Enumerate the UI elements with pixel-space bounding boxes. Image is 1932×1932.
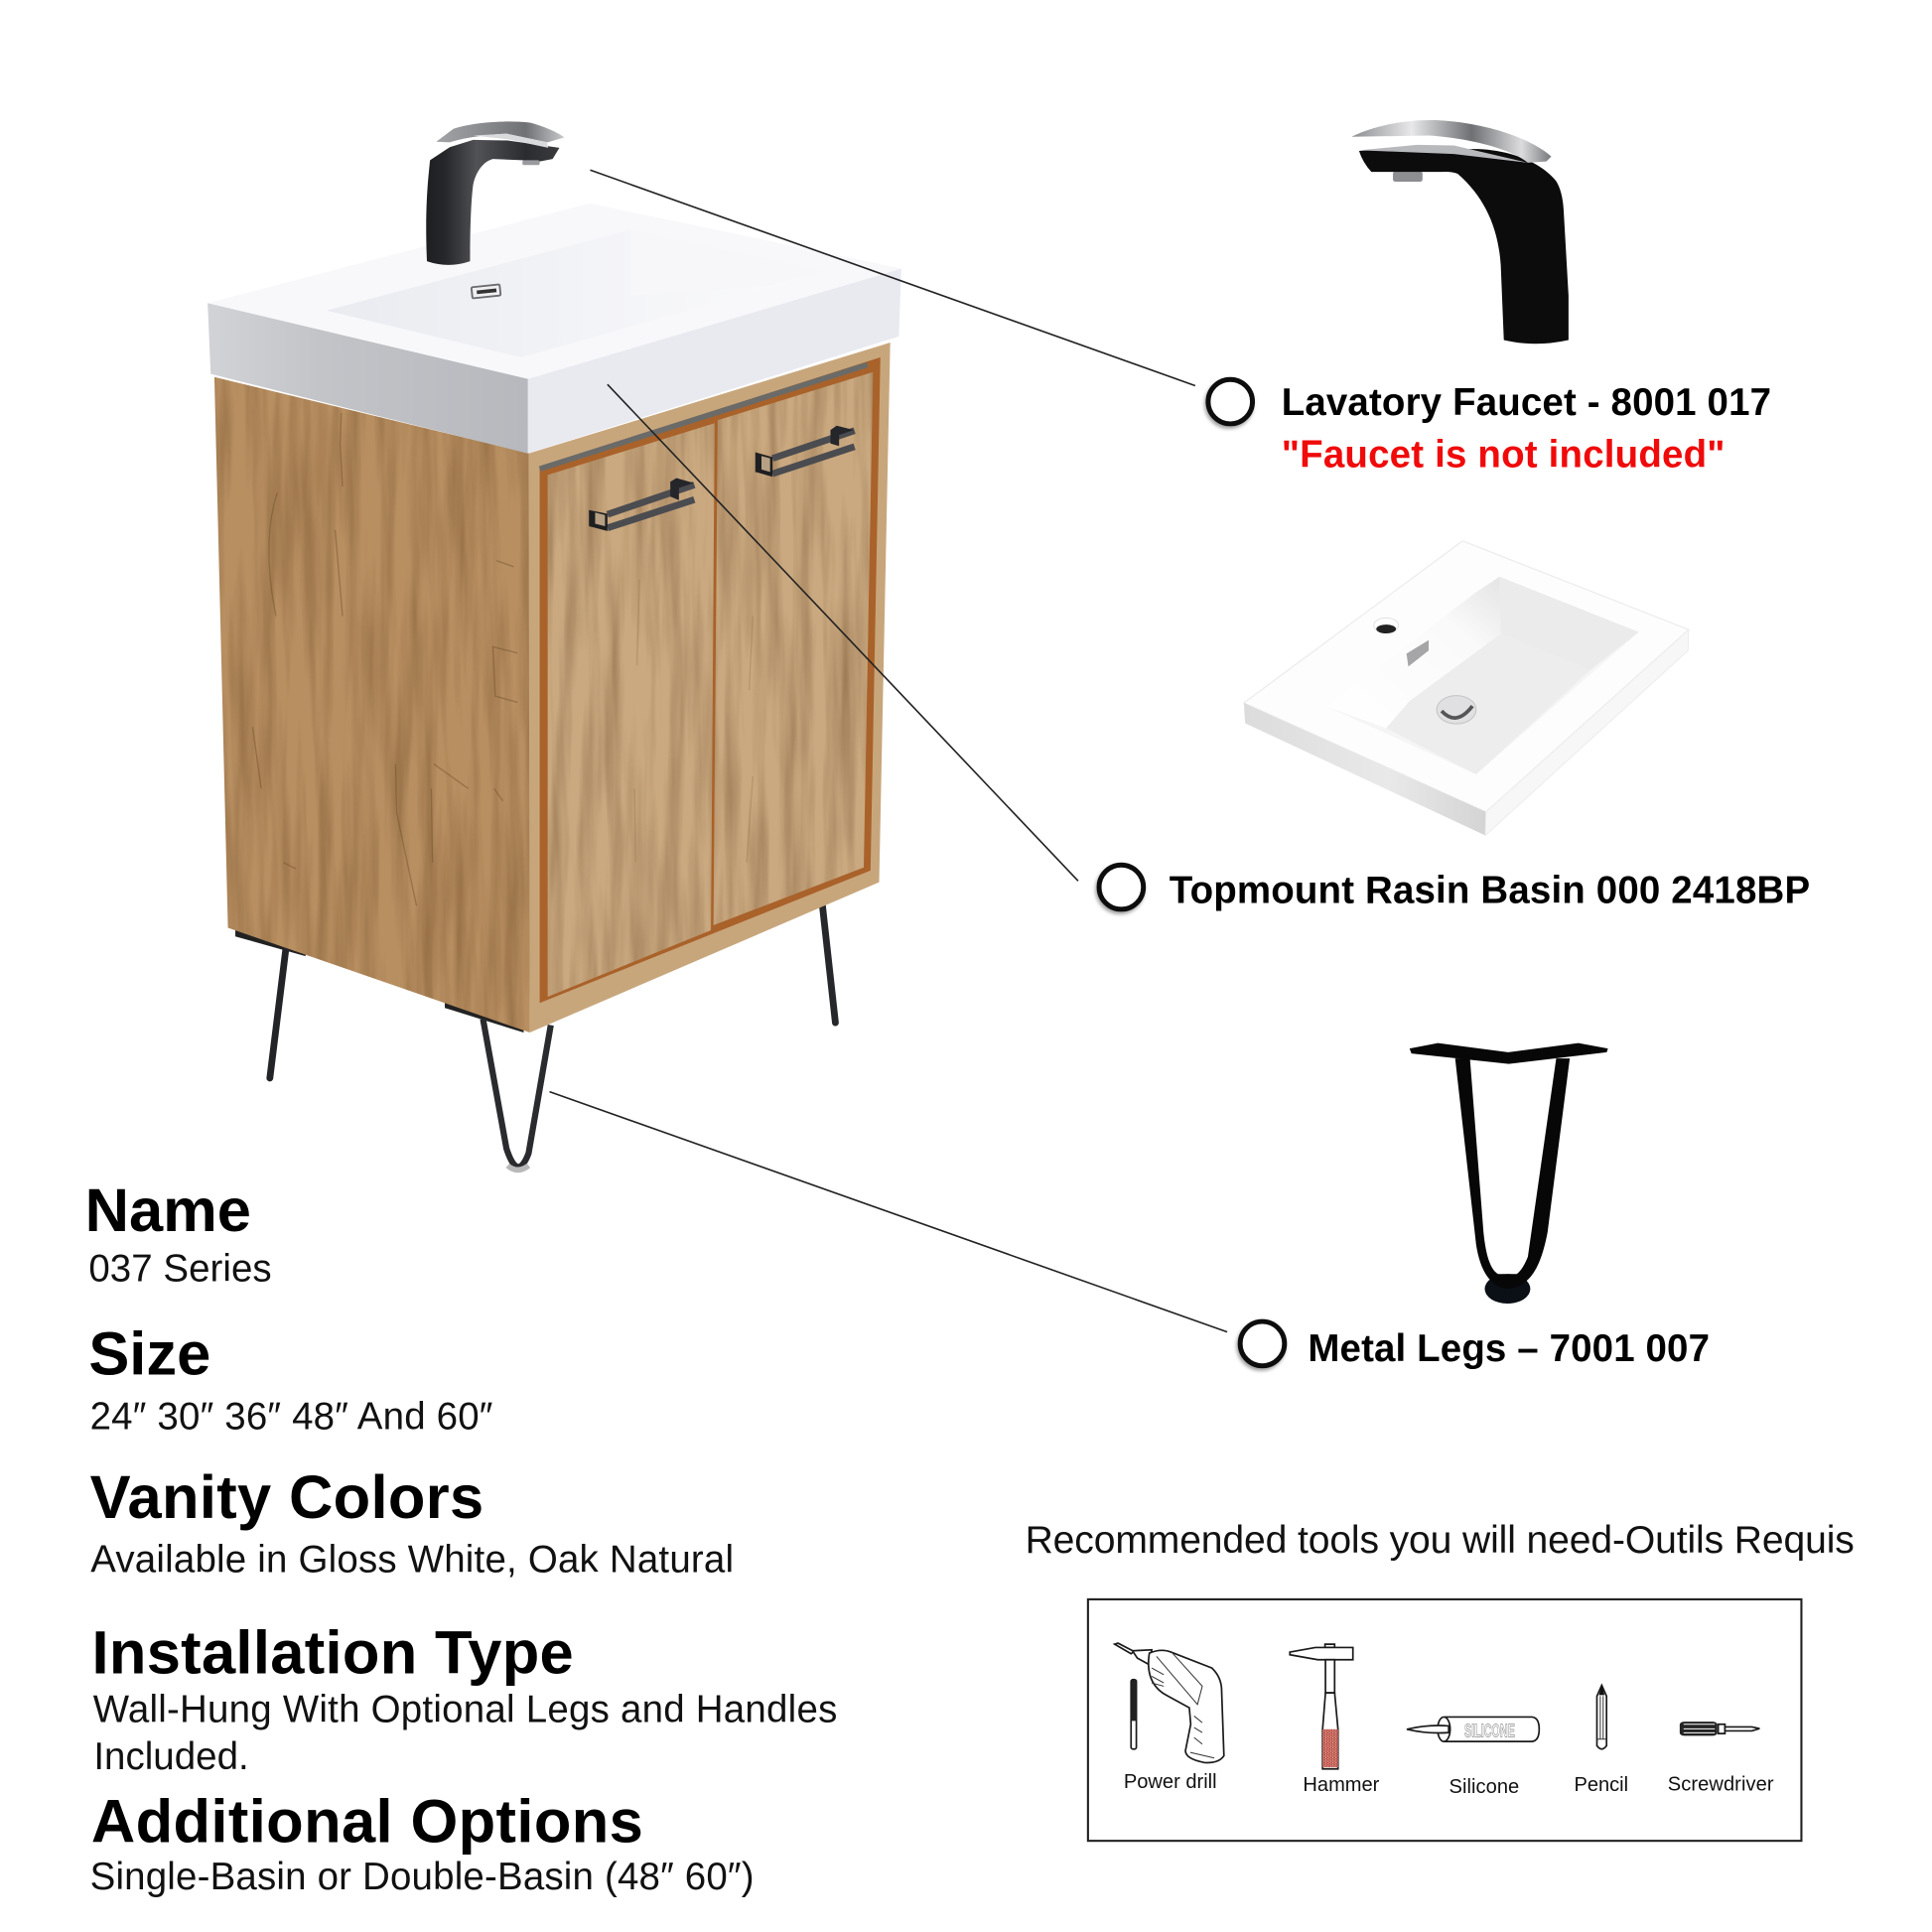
tool label: pencil: Pencil	[1574, 1774, 1628, 1796]
cabinet front frame	[528, 343, 891, 1033]
right door	[714, 372, 873, 925]
faucet chrome lever	[1351, 120, 1552, 163]
value: Available in Gloss White, Oak Natural	[90, 1539, 734, 1582]
label: topmount basin: Topmount Rasin Basin 000 2418BP	[1170, 870, 1810, 912]
leader line: basin	[608, 384, 1078, 881]
faucet aerator	[1393, 172, 1423, 182]
drain	[1437, 696, 1476, 724]
faucet on sink	[426, 121, 564, 265]
basin floor	[1386, 634, 1590, 774]
back left leg	[235, 929, 306, 1078]
faucet chrome collar	[1359, 145, 1528, 163]
countertop sink	[207, 204, 901, 454]
tool label: power drill: Power drill	[1124, 1771, 1217, 1793]
spec block: size	[88, 1319, 492, 1439]
product photo: vanity cabinet with sink	[207, 121, 901, 1170]
leader line: legs	[550, 1092, 1227, 1332]
basin slope	[1327, 577, 1501, 728]
basin inner wall	[1499, 577, 1639, 670]
icon: power drill	[1115, 1643, 1224, 1762]
basin recess	[1327, 577, 1639, 774]
icon: silicone tube	[1407, 1717, 1539, 1741]
tool label: hammer: Hammer	[1303, 1774, 1380, 1796]
label: faucet not included warning: "Faucet is not included"	[1282, 433, 1725, 476]
heading: Additional Options	[91, 1787, 643, 1856]
cabinet recess	[540, 357, 881, 1003]
tools frame	[1088, 1599, 1801, 1841]
leg mounting plate	[1410, 1043, 1608, 1064]
callout marker: legs	[1240, 1321, 1285, 1366]
label: lavatory faucet: Lavatory Faucet - 8001 017	[1282, 381, 1771, 424]
callout marker: faucet	[1208, 379, 1253, 424]
icon: silicone tube: SILICONE	[1464, 1720, 1515, 1740]
spec block: vanity colors	[90, 1463, 734, 1582]
heading: Name	[85, 1176, 251, 1245]
faucet hole	[1374, 618, 1399, 633]
panel: recommended tools	[1088, 1599, 1801, 1841]
leg foot	[1484, 1274, 1530, 1304]
basin top	[1244, 541, 1689, 812]
cabinet side panel	[214, 377, 530, 1033]
value: Single-Basin or Double-Basin (48″ 60″)	[90, 1856, 755, 1898]
spec block: name	[85, 1176, 272, 1291]
value: 037 Series	[88, 1248, 272, 1291]
faucet body	[1359, 149, 1569, 344]
tool label: screwdriver: Screwdriver	[1668, 1773, 1774, 1795]
heading: Size	[88, 1319, 210, 1388]
left door handle	[589, 479, 694, 531]
leader line: faucet	[590, 170, 1195, 385]
value line 1: Wall-Hung With Optional Legs and Handles	[93, 1688, 837, 1730]
faucet detail image	[1351, 120, 1569, 344]
right door handle	[756, 426, 855, 477]
icon: hammer	[1290, 1644, 1353, 1769]
value: 24″ 30″ 36″ 48″ And 60″	[90, 1396, 492, 1439]
overflow	[1407, 640, 1429, 666]
leg rods	[1455, 1058, 1570, 1289]
metal leg detail image	[1410, 1043, 1608, 1304]
label: metal legs: Metal Legs – 7001 007	[1308, 1327, 1710, 1370]
tool label: silicone: Silicone	[1449, 1776, 1519, 1798]
front hairpin leg	[445, 1001, 551, 1170]
heading: Installation Type	[91, 1618, 574, 1687]
icon: pencil	[1596, 1685, 1606, 1749]
heading: Vanity Colors	[90, 1463, 483, 1532]
icon: screwdriver	[1680, 1722, 1759, 1735]
tools heading: Recommended tools you will need-Outils Requis	[1026, 1519, 1855, 1562]
spec block: installation type	[91, 1618, 837, 1778]
basin right edge	[1485, 629, 1689, 835]
back right leg	[822, 905, 835, 1023]
spec block: additional options	[90, 1787, 755, 1898]
value line 2: Included.	[93, 1735, 249, 1778]
left door	[548, 423, 715, 997]
basin detail image	[1244, 541, 1689, 835]
basin left edge	[1244, 703, 1486, 835]
shadow gap above doors	[540, 364, 868, 469]
callout marker: basin	[1099, 865, 1144, 909]
